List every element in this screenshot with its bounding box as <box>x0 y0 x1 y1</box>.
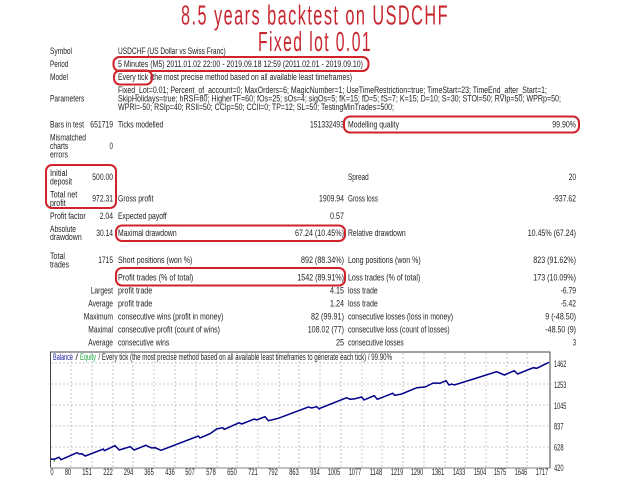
panel: test results: 823 (91.62%) <box>533 255 576 265</box>
callout: profit trades highlight <box>116 268 345 286</box>
panel: test results: 3 <box>573 338 576 348</box>
chart x axis labels: 1077 <box>349 467 361 477</box>
chart x axis labels: 80 <box>65 467 71 477</box>
panel: test settings: Symbol <box>50 46 72 56</box>
chart y axis labels: 628 <box>554 442 564 452</box>
panel: test results: profit trade <box>118 286 152 296</box>
panel: test results: 2.04 <box>100 211 113 221</box>
chart x axis labels: 1575 <box>494 467 506 477</box>
chart y axis labels <box>554 359 566 473</box>
panel: test results: 1715 <box>98 255 113 265</box>
chart x axis labels: 151 <box>82 467 92 477</box>
panel: test settings: 151332493 <box>310 120 344 130</box>
panel: test results: Gross profit <box>118 194 154 204</box>
panel: test results: Expected payoff <box>118 211 167 221</box>
chart x axis labels: 1504 <box>474 467 486 477</box>
chart x axis labels: 294 <box>124 467 133 477</box>
panel: test results: Average <box>88 338 113 348</box>
panel: test results: consecutive profit (count of wins) <box>118 324 220 334</box>
panel: test results: Long positions (won %) <box>348 255 421 265</box>
panel: test results: trades <box>50 260 69 270</box>
panel: test settings: Parameters <box>50 94 85 104</box>
panel: test settings: 99.90% <box>552 120 576 130</box>
chart: balance and equity curve <box>50 352 566 477</box>
panel: test results: deposit <box>50 176 72 186</box>
chart legend: / Every tick (the most precise method based on all available least timeframes to generate each tick) / 99.90% <box>98 352 392 362</box>
panel: test results: 10.45% (67.24) <box>528 228 576 238</box>
chart x axis labels: 1646 <box>515 467 527 477</box>
panel: test settings: Model <box>50 72 68 82</box>
panel: test results: consecutive wins (profit in money) <box>118 312 223 322</box>
panel: test settings: charts <box>50 141 69 151</box>
chart x axis labels <box>50 467 548 477</box>
panel: test results: 500.00 <box>92 172 113 182</box>
panel: test settings <box>50 46 576 160</box>
callout: deposit and net profit highlight <box>46 165 116 208</box>
panel: test results: 82 (99.91) <box>311 312 344 322</box>
panel: test results: 892 (88.34%) <box>301 255 344 265</box>
panel: test results <box>50 168 576 348</box>
panel: test results: consecutive losses <box>348 338 404 348</box>
panel: test settings: errors <box>50 150 68 160</box>
panel: test settings: 651719 <box>90 120 113 130</box>
panel: test settings: Bars in test <box>50 120 84 130</box>
panel: test settings: 0 <box>110 141 113 151</box>
chart x axis labels: 863 <box>289 467 299 477</box>
chart legend: / <box>76 352 78 362</box>
chart x axis labels: 222 <box>103 467 113 477</box>
panel: test results: Absolute <box>50 224 76 234</box>
panel: test results: 972.31 <box>92 194 113 204</box>
chart y axis labels: 420 <box>554 463 564 473</box>
panel: test results: drawdown <box>50 232 82 242</box>
chart x axis labels: 721 <box>248 467 258 477</box>
chart x axis labels: 934 <box>310 467 320 477</box>
chart x axis labels: 650 <box>227 467 237 477</box>
callout: model highlight <box>114 70 152 84</box>
title <box>181 0 449 57</box>
panel: test results: 173 (10.09%) <box>533 272 576 282</box>
panel: test settings: Every tick (the most precise method based on all available least timeframes) <box>118 72 352 82</box>
callout: maximal drawdown highlight <box>116 226 345 241</box>
panel: test results: 1.24 <box>330 298 344 308</box>
chart legend: Balance <box>53 352 73 362</box>
panel: test results: Maximum <box>84 312 113 322</box>
chart y axis labels: 1462 <box>554 359 566 369</box>
chart x axis labels: 1361 <box>432 467 444 477</box>
panel: test results: Relative drawdown <box>348 228 406 238</box>
panel: test results: consecutive loss (count of losses) <box>348 324 450 334</box>
panel: test results: Total net <box>50 190 78 200</box>
panel: test results: 9 (-48.50) <box>545 312 576 322</box>
chart legend: Equity <box>80 352 96 362</box>
panel: test results: 4.15 <box>330 286 344 296</box>
panel: test settings: Ticks modelled <box>118 120 163 130</box>
chart x axis labels: 436 <box>165 467 175 477</box>
panel: test results: Short positions (won %) <box>118 255 192 265</box>
panel: test results: Total <box>50 251 65 261</box>
panel: test results: profit trade <box>118 298 152 308</box>
chart x axis labels: 1219 <box>391 467 403 477</box>
panel: test results: loss trade <box>348 298 378 308</box>
panel: test settings: Period <box>50 59 68 69</box>
title: Fixed lot 0.01 <box>258 26 372 57</box>
panel: test results: 108.02 (77) <box>308 324 344 334</box>
panel: test results: loss trade <box>348 286 378 296</box>
chart y axis labels: 1045 <box>554 401 566 411</box>
chart x axis labels: 1433 <box>453 467 465 477</box>
panel: test results: Profit trades (% of total) <box>118 272 193 282</box>
panel: test settings: Modelling quality <box>348 120 399 130</box>
panel: test settings: USDCHF (US Dollar vs Swiss Franc) <box>118 46 226 56</box>
chart x axis labels: 0 <box>50 467 54 477</box>
panel: test results: consecutive losses (loss in money) <box>348 312 453 322</box>
panel: test results: Loss trades (% of total) <box>348 272 420 282</box>
panel: test settings: 5 Minutes (M5) 2011.01.02 22:00 - 2019.09.18 12:59 (2011.02.01 - 2019.09.10) <box>118 59 363 69</box>
panel: test results: -48.50 (9) <box>545 324 576 334</box>
panel: test results: 67.24 (10.45%) <box>295 228 344 238</box>
panel: test results: profit <box>50 198 66 208</box>
panel: test results: Initial <box>50 168 67 178</box>
chart x axis labels: 507 <box>185 467 195 477</box>
chart legend <box>53 352 392 362</box>
panel: test results: 25 <box>336 338 344 348</box>
panel: test results: -6.79 <box>561 286 576 296</box>
panel: test results: Maximal <box>88 324 113 334</box>
chart x axis labels: 1290 <box>411 467 423 477</box>
panel: test results: 1542 (89.91%) <box>297 272 344 282</box>
chart x axis labels: 1005 <box>328 467 340 477</box>
panel: test results: Average <box>88 298 113 308</box>
callout: modelling quality highlight <box>344 116 579 132</box>
panel: test results: Profit factor <box>50 211 86 221</box>
callout: period highlight <box>114 57 368 71</box>
panel: test results: Maximal drawdown <box>118 228 177 238</box>
chart x axis labels: 792 <box>268 467 278 477</box>
chart y axis labels: 1253 <box>554 380 566 390</box>
panel: test results: 20 <box>569 172 576 182</box>
panel: test results: Spread <box>348 172 369 182</box>
panel: test settings: Mismatched <box>50 132 86 142</box>
panel: test results: 30.14 <box>96 228 113 238</box>
panel: test results: -5.42 <box>561 298 576 308</box>
panel: test results: Largest <box>91 286 113 296</box>
chart x axis labels: 1148 <box>370 467 382 477</box>
panel: test results: 0.57 <box>330 211 344 221</box>
chart y axis labels: 837 <box>554 422 564 432</box>
panel: test results: 1909.94 <box>319 194 344 204</box>
panel: test results: -937.62 <box>553 194 576 204</box>
panel: test settings: WPRl=-50; RSIp=40; RSIl=50; CCIp=50; CCIl=0; TP=12; SL=50; TestingMinTrades=500; <box>118 102 394 112</box>
chart x axis labels: 578 <box>206 467 216 477</box>
panel: test results: Gross loss <box>348 194 378 204</box>
title: 8.5 years backtest on USDCHF <box>181 0 449 30</box>
panel: test results: consecutive wins <box>118 338 170 348</box>
chart x axis labels: 1717 <box>536 467 548 477</box>
chart x axis labels: 365 <box>144 467 154 477</box>
